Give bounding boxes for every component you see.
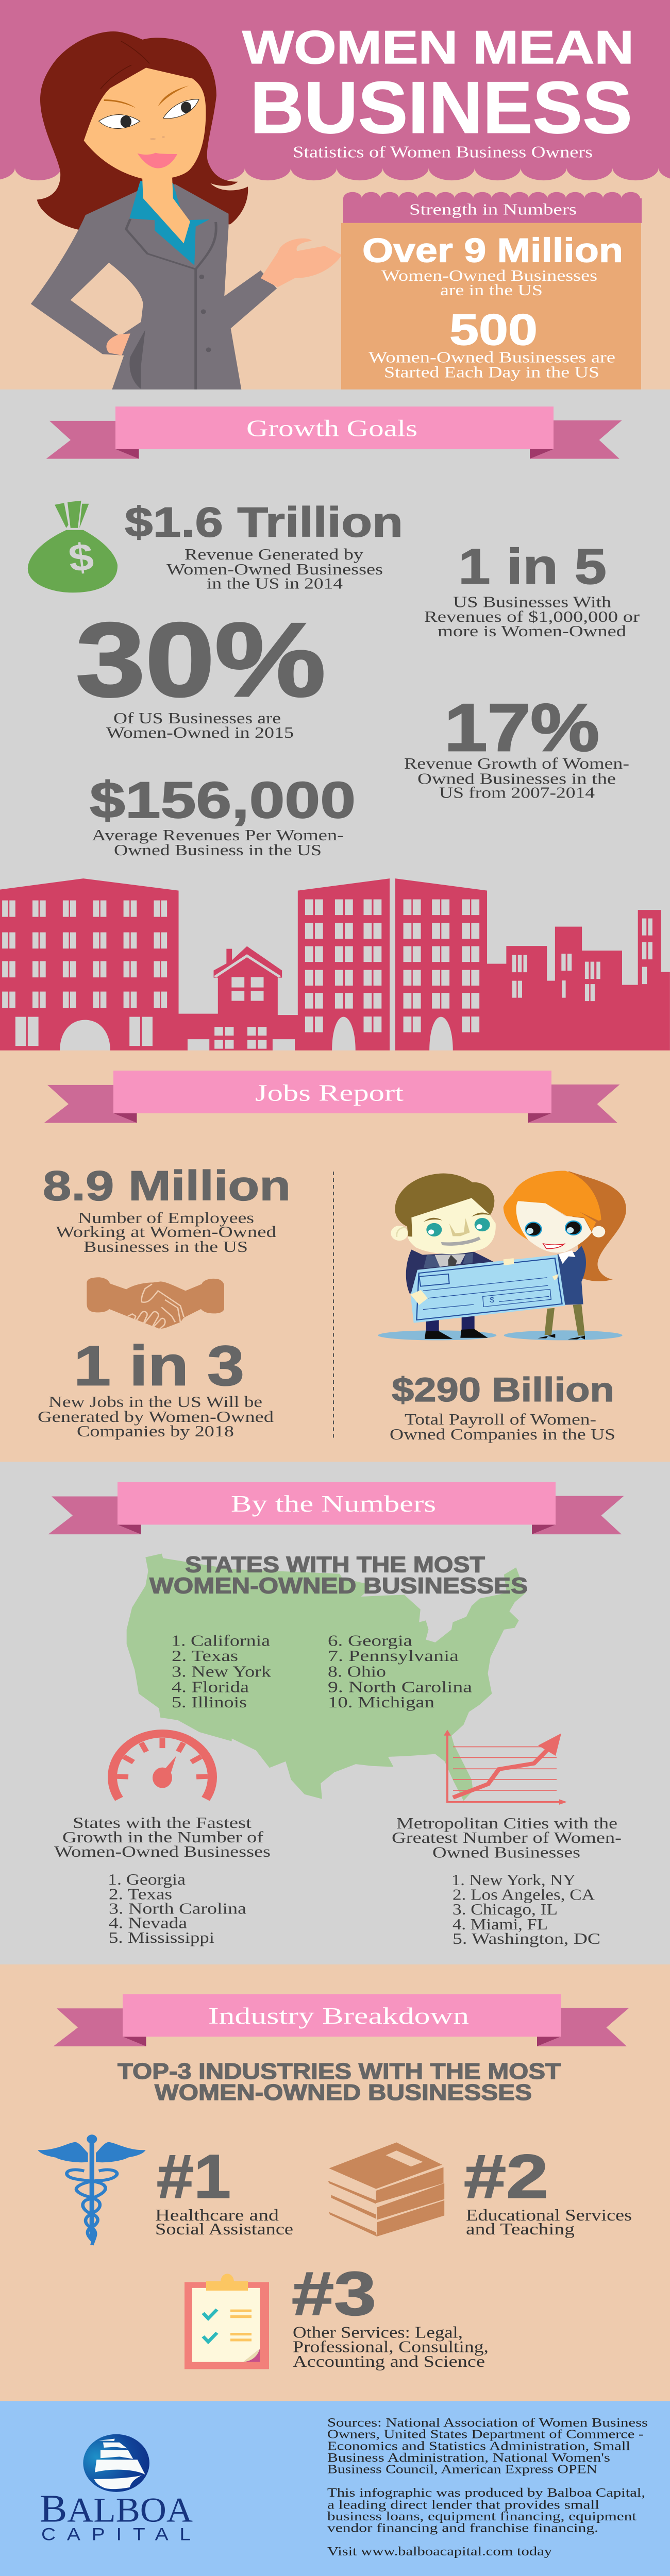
list: metropolitan cities: Owned Businesses xyxy=(432,1844,580,1861)
stat: 156000: $156,000 xyxy=(90,771,356,828)
stat: number 2 industry: #2 xyxy=(464,2142,548,2211)
stat: 1 in 3: 1 in 3 xyxy=(74,1334,244,1398)
stat: 17 percent xyxy=(404,690,629,802)
stat: 1 in 3 xyxy=(38,1334,274,1440)
ribbon: growth goals: Growth Goals xyxy=(246,416,417,442)
stat: 290 billion: $290 Billion xyxy=(392,1370,614,1409)
stat: number 1 industry xyxy=(155,2142,293,2239)
stat: 1 in 3: Companies by 2018 xyxy=(77,1423,234,1440)
text: sources and credits: a leading direct lender that provides small xyxy=(327,2498,599,2512)
divider xyxy=(333,1172,334,1438)
stat: 1.6 trillion: in the US in 2014 xyxy=(207,575,343,592)
stat: 500: Started Each Day in the US xyxy=(384,364,599,381)
stat: 30 percent: Of US Businesses are xyxy=(113,710,281,727)
stat: number 1 industry: #1 xyxy=(157,2142,231,2211)
panel: by the numbers xyxy=(0,1462,670,1964)
heading: states with the most: WOMEN-OWNED BUSINESSES xyxy=(149,1573,528,1598)
title: BUSINESS xyxy=(250,66,632,148)
heading: states with the most: STATES WITH THE MOST xyxy=(185,1552,485,1577)
stat: 1 in 5: 1 in 5 xyxy=(458,539,607,595)
stat: number 2 industry: and Teaching xyxy=(466,2219,575,2239)
list: top states left xyxy=(171,1633,272,1711)
list: top states left: 2. Texas xyxy=(172,1648,238,1665)
list: top states left: 3. New York xyxy=(172,1664,272,1681)
subtitle: Statistics of Women Business Owners xyxy=(293,144,593,161)
list: fastest growth states: 2. Texas xyxy=(109,1886,172,1903)
icon: handshake xyxy=(87,1277,224,1329)
stat: 17 percent: 17% xyxy=(444,690,599,765)
text: sources and credits: Business Council, American Express OPEN xyxy=(327,2462,597,2476)
list: metropolitan cities: Metropolitan Cities with the xyxy=(396,1815,617,1832)
scalloped header xyxy=(343,192,642,223)
text: sources and credits: Owners, United States Department of Commerce - xyxy=(327,2427,644,2441)
illustration: couple holding check xyxy=(378,1171,626,1340)
stat: 290 billion: Owned Companies in the US xyxy=(390,1426,615,1443)
list: top states right: 9. North Carolina xyxy=(328,1679,473,1696)
text: sources and credits: business loans, equipment financing, equipment xyxy=(327,2510,637,2523)
stat: 156000: Owned Business in the US xyxy=(114,842,322,859)
stat: 1 in 3: New Jobs in the US Will be xyxy=(48,1394,262,1411)
list: metropolitan cities: 2. Los Angeles, CA xyxy=(453,1887,595,1904)
stat: number 2 industry: Educational Services xyxy=(466,2206,632,2225)
list: top states left: 1. California xyxy=(171,1633,271,1650)
list: fastest growth states xyxy=(54,1815,271,1947)
stat: 30 percent: 30% xyxy=(76,601,326,718)
stat: 500: 500 xyxy=(449,306,538,354)
stat: over 9 million xyxy=(362,231,623,299)
heading: states with the most xyxy=(149,1552,528,1598)
list: fastest growth states: Women-Owned Businesses xyxy=(54,1843,271,1860)
list: metropolitan cities: 5. Washington, DC xyxy=(453,1930,600,1947)
stat: 1.6 trillion: Women-Owned Businesses xyxy=(166,561,383,578)
chart: growth line xyxy=(444,1730,567,1805)
stat: 8.9 million: Businesses in the US xyxy=(83,1239,248,1256)
list: fastest growth states: 4. Nevada xyxy=(109,1914,188,1932)
panel: jobs report xyxy=(0,1050,670,1462)
ribbon: industry breakdown: Industry Breakdown xyxy=(208,2003,469,2029)
list: metropolitan cities xyxy=(392,1815,622,1947)
stat: 500: Women-Owned Businesses are xyxy=(368,349,615,366)
panel: industry breakdown xyxy=(0,1964,670,2401)
stat: 8.9 million xyxy=(43,1162,291,1256)
list: fastest growth states: 3. North Carolina xyxy=(109,1901,247,1918)
stat: number 3 industry xyxy=(292,2259,489,2371)
stat: over 9 million: Over 9 Million xyxy=(362,231,623,269)
stat: 1 in 3: Generated by Women-Owned xyxy=(38,1409,274,1426)
stat: 290 billion: Total Payroll of Women- xyxy=(405,1411,596,1429)
list: top states right xyxy=(328,1633,473,1711)
list: top states left: 4. Florida xyxy=(172,1679,249,1696)
heading: top 3 industries: TOP-3 INDUSTRIES WITH THE MOST xyxy=(118,2059,561,2083)
stat: number 1 industry: Healthcare and xyxy=(155,2206,279,2225)
panel: strength in numbers xyxy=(341,192,642,389)
icon: speedometer xyxy=(112,1734,212,1799)
stat: 1 in 5 xyxy=(424,539,640,640)
stat: 156000 xyxy=(90,771,356,859)
stat: 8.9 million: Working at Women-Owned xyxy=(56,1224,276,1241)
text: sources and credits xyxy=(327,2416,648,2558)
list: top states right: 7. Pennsylvania xyxy=(328,1648,459,1665)
title: WOMEN MEAN xyxy=(242,21,634,73)
logo wordmark: CAPITAL xyxy=(41,2524,191,2544)
icon: books xyxy=(328,2142,444,2236)
heading: top 3 industries xyxy=(118,2059,561,2105)
stat: 8.9 million: Number of Employees xyxy=(78,1210,254,1227)
stat: 290 billion xyxy=(390,1370,615,1443)
stat: 1 in 5: US Businesses With xyxy=(453,594,611,611)
logo ship emblem xyxy=(83,2434,149,2492)
list: fastest growth states: 1. Georgia xyxy=(108,1871,186,1888)
list: fastest growth states: Growth in the Number of xyxy=(62,1829,263,1846)
text: sources and credits: Economics and Statistics Administration, Small xyxy=(327,2439,630,2453)
text: sources and credits: Sources: National Association of Women Business xyxy=(327,2416,648,2430)
text: sources and credits: Visit www.balboacapital.com today xyxy=(327,2545,552,2558)
illustration: city skyline xyxy=(0,878,670,1050)
ribbon: industry breakdown xyxy=(54,1994,629,2046)
body box xyxy=(341,223,641,389)
logo wordmark: BALBOA xyxy=(40,2486,193,2530)
icon: clipboard xyxy=(185,2274,269,2369)
list: metropolitan cities: 1. New York, NY xyxy=(451,1872,576,1889)
stat: 1 in 5: Revenues of $1,000,000 or xyxy=(424,608,640,626)
stat: 17 percent: Owned Businesses in the xyxy=(417,771,616,788)
stat: over 9 million: are in the US xyxy=(440,282,543,299)
stat: number 3 industry: Accounting and Science xyxy=(293,2352,485,2371)
stat: 1 in 5: more is Women-Owned xyxy=(438,623,626,640)
logo: balboa capital xyxy=(40,2434,193,2544)
stat: number 1 industry: Social Assistance xyxy=(155,2219,293,2239)
list: top states left: 5. Illinois xyxy=(172,1694,247,1711)
icon: money bag xyxy=(28,501,118,592)
title xyxy=(242,21,634,148)
ribbon: jobs report: Jobs Report xyxy=(255,1080,404,1106)
list: fastest growth states: 5. Mississippi xyxy=(109,1929,214,1947)
stat: number 2 industry xyxy=(464,2142,632,2239)
icon glyph: dollar sign: $ xyxy=(66,535,96,580)
ribbon: by the numbers: By the Numbers xyxy=(231,1491,436,1517)
stat: 8.9 million: 8.9 Million xyxy=(43,1162,291,1209)
text: sources and credits: Business Administration, National Women's xyxy=(327,2451,610,2464)
stat: 30 percent: Women-Owned in 2015 xyxy=(106,724,294,741)
ribbon: by the numbers xyxy=(48,1482,624,1534)
stat: over 9 million: Women-Owned Businesses xyxy=(381,267,597,285)
panel: growth goals xyxy=(0,389,670,1050)
list: fastest growth states: States with the Fastest xyxy=(73,1815,252,1832)
heading: top 3 industries: WOMEN-OWNED BUSINESSES xyxy=(155,2080,532,2105)
list: top states right: 6. Georgia xyxy=(328,1633,413,1650)
stat: 1.6 trillion xyxy=(125,498,403,592)
stat: number 3 industry: #3 xyxy=(292,2259,376,2328)
stat: 1.6 trillion: $1.6 Trillion xyxy=(125,498,403,546)
ribbon: growth goals xyxy=(46,406,622,459)
stat: 500 xyxy=(368,306,615,381)
map: united states xyxy=(127,1554,526,1801)
panel: footer xyxy=(0,2401,670,2576)
illustration: couple holding check: $ xyxy=(490,1296,495,1304)
stat: 17 percent: Revenue Growth of Women- xyxy=(404,755,629,772)
list: top states right: 10. Michigan xyxy=(328,1694,434,1711)
icon: caduceus xyxy=(38,2134,146,2246)
list: metropolitan cities: 4. Miami, FL xyxy=(453,1916,548,1933)
list: metropolitan cities: Greatest Number of Women- xyxy=(392,1829,622,1846)
stat: 17 percent: US from 2007-2014 xyxy=(439,785,595,802)
panel: header background xyxy=(0,0,670,389)
stat: 1.6 trillion: Revenue Generated by xyxy=(185,546,364,563)
stat: 156000: Average Revenues Per Women- xyxy=(92,827,344,844)
text: sources and credits: This infographic was produced by Balboa Capital, xyxy=(327,2485,645,2499)
strength heading: Strength in Numbers xyxy=(409,201,577,218)
illustration: businesswoman xyxy=(31,31,342,389)
ribbon: jobs report xyxy=(44,1071,619,1123)
stat: number 3 industry: Other Services: Legal, xyxy=(293,2323,463,2342)
list: top states right: 8. Ohio xyxy=(328,1664,386,1681)
stat: number 3 industry: Professional, Consulting, xyxy=(293,2337,489,2356)
text: sources and credits: vendor financing and franchise financing. xyxy=(327,2521,598,2535)
list: metropolitan cities: 3. Chicago, IL xyxy=(453,1901,558,1919)
